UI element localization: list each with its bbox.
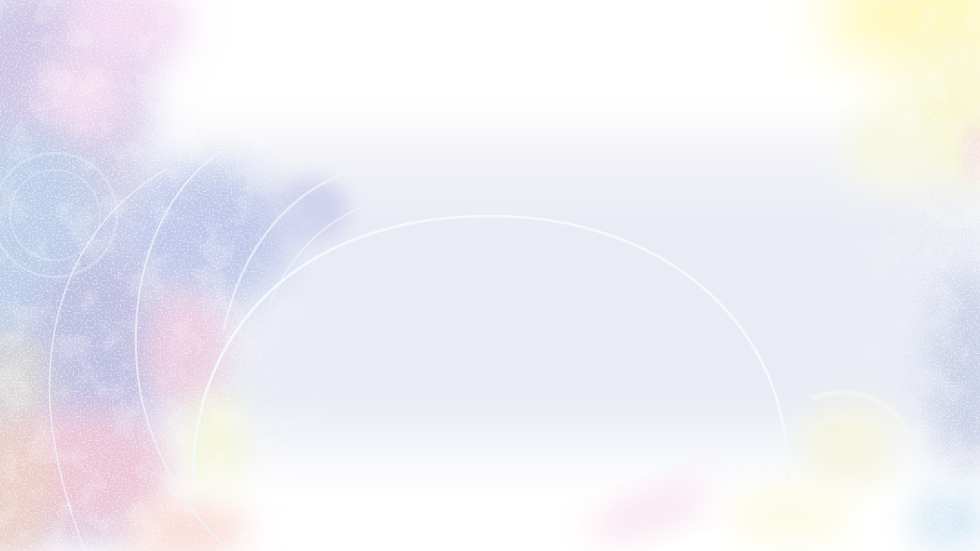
central arc bbox=[193, 216, 788, 480]
circular ornament: left bbox=[0, 153, 117, 277]
colour wash: right and bottom bbox=[583, 270, 980, 551]
circular ornament: lower right bbox=[799, 393, 912, 462]
colour wash: top right bbox=[825, 0, 980, 185]
colour wash: left side bbox=[0, 0, 348, 551]
left concentric arcs bbox=[49, 152, 360, 551]
